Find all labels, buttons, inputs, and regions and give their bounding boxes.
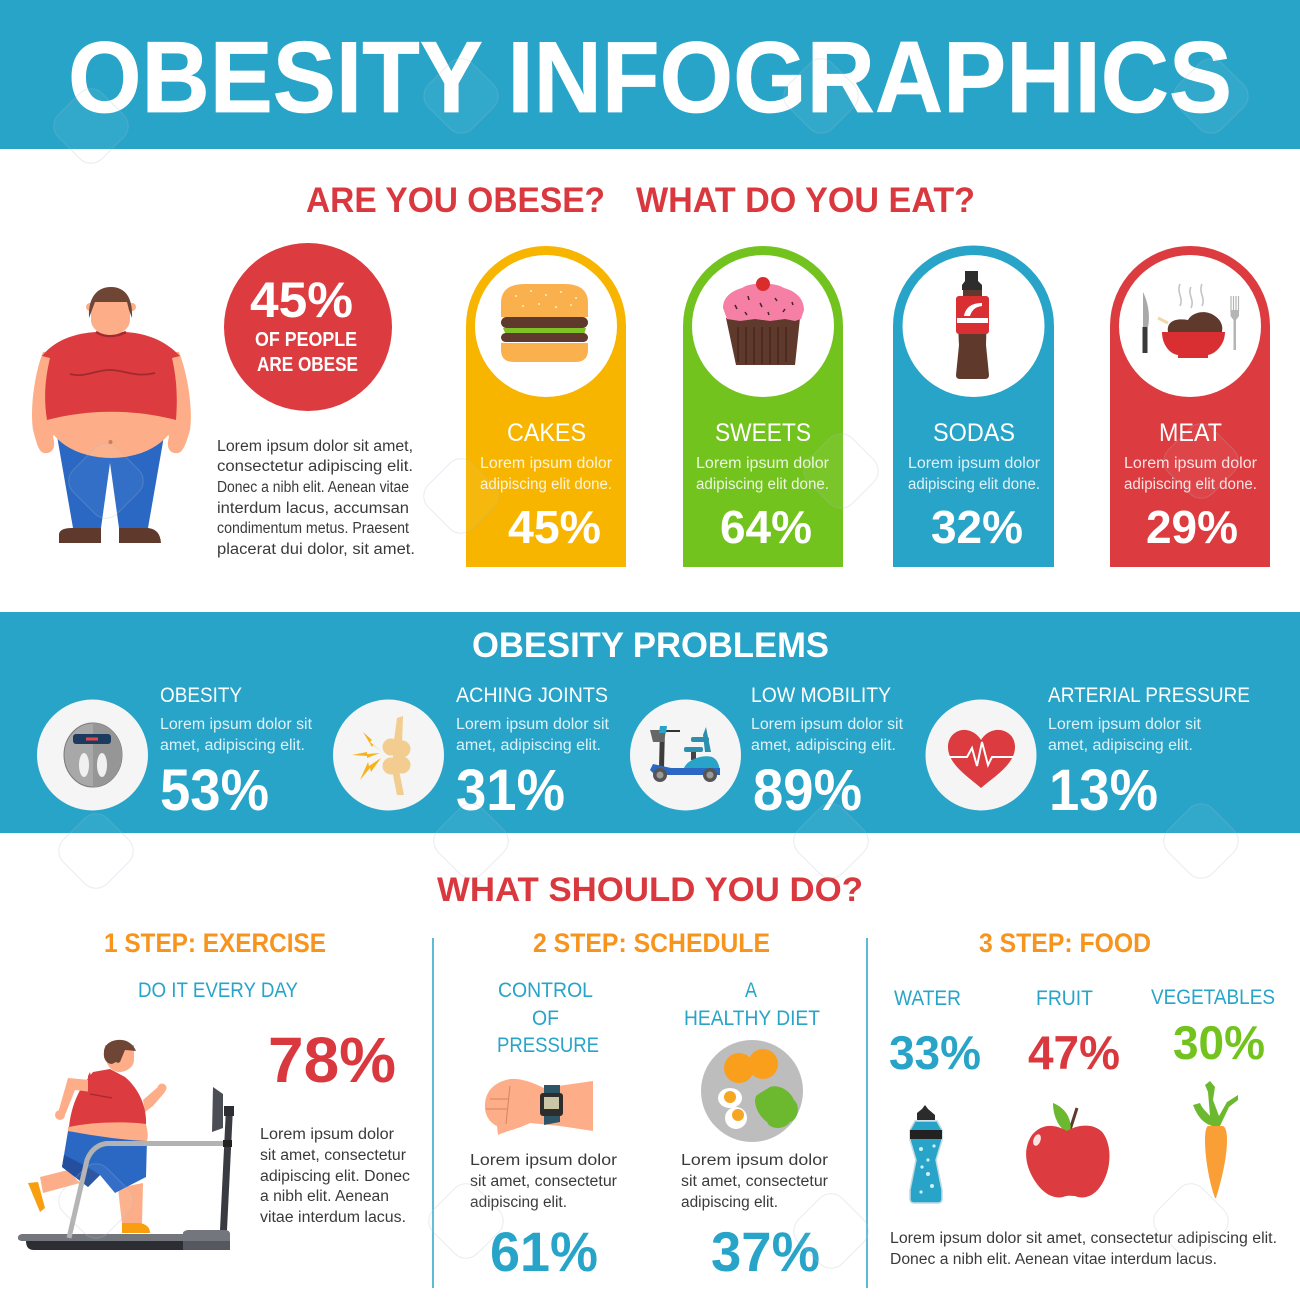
panel: meat [1110,246,1270,567]
heading: what do you eat: WHAT DO YOU EAT? [636,181,975,220]
panel: sodas: adipiscing elit done. [908,476,1040,493]
step 2: schedule: adipiscing elit. [681,1194,778,1211]
step 3: food: 33% [889,1026,981,1079]
step 2: schedule: 61% [490,1220,598,1283]
step 1: exercise: 78% [268,1024,396,1096]
step 2: schedule: OF [532,1007,559,1030]
step 1: exercise [18,928,410,1250]
step 3: food: 30% [1173,1016,1265,1069]
step 1: exercise: vitae interdum lacus. [260,1209,406,1226]
panel: obesity problems [0,612,1300,833]
panel: sweets: Lorem ipsum dolor [696,455,829,472]
problem: low mobility: amet, adipiscing elit. [751,737,896,754]
header band [0,0,1300,149]
icon: soda bottle [956,271,989,379]
problem: arterial pressure: ARTERIAL PRESSURE [1048,684,1250,707]
text block: intro: placerat dui dolor, sit amet. [217,541,415,558]
text block: intro: Donec a nibh elit. Aenean vitae [217,479,409,496]
step 2: schedule: sit amet, consectetur [681,1173,828,1190]
icon: mobility scooter [650,726,720,782]
panel: sodas: Lorem ipsum dolor [908,455,1040,472]
panel: sweets [683,246,843,567]
step 3: food [889,928,1277,1268]
panel: sweets: SWEETS [715,419,811,447]
icon: water bottle [910,1105,942,1203]
step 2: schedule: PRESSURE [497,1034,599,1057]
panel: meat: Lorem ipsum dolor [1124,455,1257,472]
step 1: exercise: adipiscing elit. Donec [260,1168,410,1185]
step 3: food: Donec a nibh elit. Aenean vitae interdum lacus. [890,1251,1217,1268]
stat circle: 45 percent obese: OF PEOPLE [255,329,357,351]
step 2: schedule: 37% [711,1220,820,1283]
panel: cakes [466,246,626,567]
text block: intro: consectetur adipiscing elit. [217,458,413,475]
problem: aching joints: amet, adipiscing elit. [456,737,601,754]
step 3: food: 47% [1028,1026,1120,1079]
step 3: food: WATER [894,987,961,1010]
text block: intro [217,438,415,558]
step 2: schedule: HEALTHY DIET [684,1007,820,1030]
panel: meat: adipiscing elit done. [1124,476,1257,493]
panel: cakes: CAKES [507,419,586,447]
step 1: exercise: Lorem ipsum dolor [260,1126,394,1143]
stat circle: 45 percent obese: 45% [250,272,353,328]
problem: low mobility: Lorem ipsum dolor sit [751,716,904,733]
step 2: schedule: sit amet, consectetur [470,1173,617,1190]
icon: bathroom scale [64,723,122,787]
icon: obese man standing [32,287,191,543]
problem: arterial pressure: Lorem ipsum dolor sit [1048,716,1202,733]
step 1: exercise: DO IT EVERY DAY [138,979,298,1002]
step 2: schedule [470,928,828,1283]
step 3: food: 3 STEP: FOOD [979,928,1151,958]
panel: meat: MEAT [1159,419,1222,447]
panel: cakes: adipiscing elit done. [480,476,612,493]
icon: carrot [1193,1081,1238,1198]
problem: arterial pressure [926,684,1250,823]
icon: man on treadmill [18,1040,234,1250]
heading: obesity problems: OBESITY PROBLEMS [472,626,829,665]
step 1: exercise: sit amet, consectetur [260,1147,406,1164]
problem: obesity: amet, adipiscing elit. [160,737,305,754]
stat circle: 45 percent obese [224,243,392,411]
text block: intro: condimentum metus. Praesent [217,520,410,537]
step 2: schedule: 2 STEP: SCHEDULE [533,928,770,958]
problem: aching joints: 31% [456,758,565,823]
problem: obesity: OBESITY [160,684,242,707]
icon: heart with pulse [948,730,1015,788]
problem: obesity: Lorem ipsum dolor sit [160,716,313,733]
problem: aching joints: ACHING JOINTS [456,684,608,707]
panel: sweets: 64% [720,501,812,553]
panel: sodas: SODAS [933,419,1015,447]
text block: intro: Lorem ipsum dolor sit amet, [217,438,413,455]
icon: burger [501,284,588,362]
step 2: schedule: Lorem ipsum dolor [681,1152,828,1169]
title: OBESITY INFOGRAPHICS [68,22,1232,134]
problem: obesity [37,684,313,823]
heading: what should you do: WHAT SHOULD YOU DO? [437,871,863,909]
step 2: schedule: CONTROL [498,979,593,1002]
step 1: exercise: a nibh elit. Aenean [260,1188,389,1205]
step 3: food: FRUIT [1036,987,1093,1010]
problem: arterial pressure: amet, adipiscing elit. [1048,737,1193,754]
icon: wrist with watch [485,1079,593,1135]
step 3: food: VEGETABLES [1151,986,1275,1009]
panel: sodas: 32% [931,501,1023,553]
step 1: exercise: 1 STEP: EXERCISE [104,928,326,958]
panel: meat: 29% [1146,501,1238,553]
icon: apple [1026,1103,1109,1197]
problem: low mobility [630,684,904,823]
icon: aching knee joint [352,716,410,795]
step 2: schedule: Lorem ipsum dolor [470,1152,617,1169]
problem: aching joints: Lorem ipsum dolor sit [456,716,610,733]
stat circle: 45 percent obese: ARE OBESE [257,354,358,376]
icon: plate with healthy food [701,1040,803,1142]
icon: cupcake [723,277,804,365]
problem: obesity: 53% [160,758,269,823]
heading: are you obese: ARE YOU OBESE? [306,181,605,220]
step 3: food: Lorem ipsum dolor sit amet, consectetur adipiscing elit. [890,1230,1277,1247]
icon: meat bowl with cutlery [1142,284,1239,358]
panel: sodas [893,245,1054,567]
panel: cakes: Lorem ipsum dolor [480,455,612,472]
problem: aching joints [333,684,610,823]
panel: cakes: 45% [508,501,601,553]
text block: intro: interdum lacus, accumsan [217,500,409,517]
step 2: schedule: adipiscing elit. [470,1194,567,1211]
step 2: schedule: A [745,979,757,1002]
problem: low mobility: 89% [753,758,862,823]
panel: sweets: adipiscing elit done. [696,476,829,493]
problem: arterial pressure: 13% [1049,758,1158,823]
problem: low mobility: LOW MOBILITY [751,684,891,707]
